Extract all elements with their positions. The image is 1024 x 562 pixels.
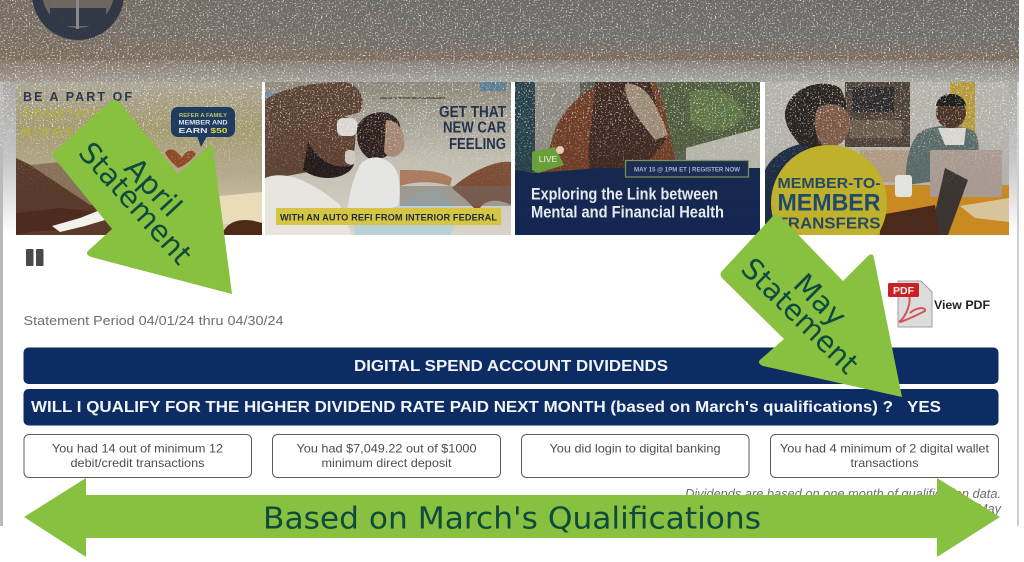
webinar date tag: MAY 15 @ 1PM ET | REGISTER NOW xyxy=(634,166,741,174)
yellow circle badge: MEMBER xyxy=(778,190,880,216)
May statement label: Statement xyxy=(735,251,865,381)
live badge: LIVE xyxy=(539,154,558,164)
referral speech bubble: MEMBER AND xyxy=(178,120,228,126)
man with hat xyxy=(265,82,363,235)
heading bar: digital spend account dividends xyxy=(24,348,998,384)
banner 2 heading: GET THAT xyxy=(439,104,506,121)
banner 1 heading: BE A PART OF xyxy=(23,90,132,104)
webinar title xyxy=(531,184,724,222)
webinar title: Mental and Financial Health xyxy=(531,202,724,222)
qualification card: transactions xyxy=(24,434,252,478)
dividends footnote xyxy=(685,486,1003,516)
statement period text: Statement Period 04/01/24 thru 04/30/24 xyxy=(24,313,284,328)
PDF icon and link xyxy=(888,281,990,327)
webinar title: Exploring the Link between xyxy=(531,184,718,204)
qualification card: direct deposit xyxy=(272,434,500,478)
foreground laptop and desk items xyxy=(880,168,1009,235)
May statement label: May xyxy=(787,267,853,333)
banner 3: live webinar xyxy=(515,82,760,235)
referral speech bubble: EARN $50 xyxy=(178,128,228,135)
arrow: April statement xyxy=(52,100,232,294)
qualification card: transactions: You had 14 out of minimum 12 xyxy=(52,442,223,456)
banner 2 heading: FEELING xyxy=(449,136,506,153)
view pdf label: View PDF xyxy=(934,298,990,312)
icon: pdf document: PDF xyxy=(893,285,915,297)
arrow label: Based on March's Qualifications xyxy=(263,502,761,536)
webinar date tag xyxy=(626,160,748,177)
qualification card: direct deposit: You had $7,049.22 out of $1000 xyxy=(296,442,477,456)
yellow circle badge: MEMBER-TO- xyxy=(778,175,881,192)
pause icon xyxy=(26,249,44,266)
banner 2 yellow strip: WITH AN AUTO REFI FROM INTERIOR FEDERAL xyxy=(280,212,497,222)
banner 2: auto refi xyxy=(265,82,511,235)
banner 2 text xyxy=(276,104,506,225)
qualification card: login: You did login to digital banking xyxy=(550,442,720,456)
April statement label: Statement xyxy=(72,135,199,271)
banner 1: family referral xyxy=(16,82,262,235)
logo circle xyxy=(32,0,124,40)
site header band xyxy=(0,0,1019,235)
banner 1 text xyxy=(23,90,235,147)
banner 2 heading: NEW CAR xyxy=(443,120,506,136)
woman xyxy=(346,112,511,235)
live badge xyxy=(532,146,564,173)
webinar title panel xyxy=(515,146,760,235)
speckle noise overlay xyxy=(0,0,1019,192)
qualification card: digital wallet: You had 4 minimum of 2 digital wallet xyxy=(780,442,990,456)
qualification card: login xyxy=(522,434,749,478)
man with laptop xyxy=(906,94,1002,197)
banner 1 yellow lines: BIGGER xyxy=(23,127,86,139)
qualification card: digital wallet xyxy=(770,434,998,478)
banner 1 yellow lines: SOMETHING xyxy=(23,109,113,121)
banner 4: member to member transfers xyxy=(765,82,1009,235)
yellow circle badge xyxy=(771,145,887,235)
yellow circle badge: TRANSFERS xyxy=(778,216,881,232)
qualification card: digital wallet: transactions xyxy=(850,456,918,470)
heading bar: digital spend account dividends: DIGITAL SPEND ACCOUNT DIVIDENDS xyxy=(354,358,668,375)
arrow: May statement xyxy=(720,214,902,397)
April statement label: April xyxy=(118,151,189,224)
banner 2 yellow strip xyxy=(276,208,501,225)
banner 2 heading xyxy=(439,104,506,153)
referral speech bubble: REFER A FAMILY xyxy=(179,113,227,119)
heading bar: qualification question: YES xyxy=(907,399,941,416)
arrow: based on March's qualifications xyxy=(24,478,1000,557)
banner 1 yellow lines xyxy=(23,109,113,139)
dividends footnote: Dividends are based on one month of qualification data. xyxy=(685,486,1001,501)
heading bar: qualification question xyxy=(24,389,998,426)
referral speech bubble xyxy=(171,107,235,147)
qualification card: direct deposit: minimum direct deposit xyxy=(322,456,452,470)
heading bar: qualification question: WILL I QUALIFY FOR THE HIGHER DIVIDEND RATE PAID NEXT MONTH (based on March's qualifications) ? xyxy=(31,399,893,416)
qualification card: transactions: debit/credit transactions xyxy=(70,456,204,470)
dividends footnote: May xyxy=(977,501,1003,516)
woman in foreground xyxy=(765,84,850,224)
